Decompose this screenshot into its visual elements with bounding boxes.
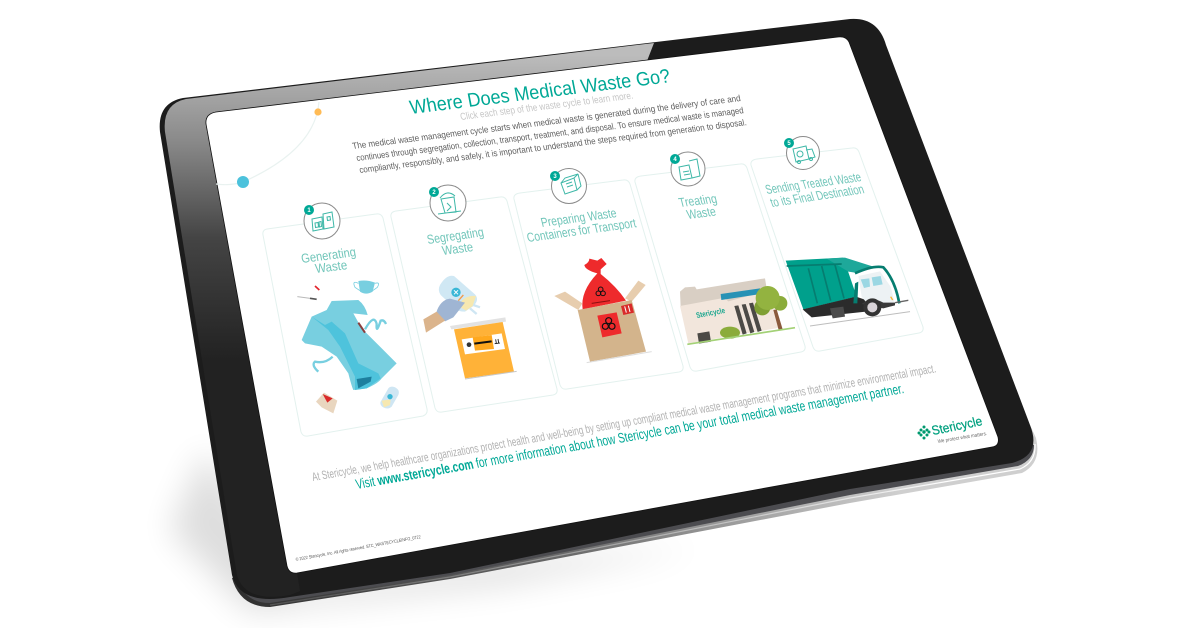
illustration: gown and waste items: [297, 280, 399, 413]
tablet device: [160, 19, 1037, 612]
logo tagline: We protect what matters.: [937, 431, 988, 445]
heading: Waste: [441, 239, 474, 258]
logo wordmark: Stericycle: [930, 413, 984, 438]
decorative arc with dots: [216, 102, 322, 188]
heading: [763, 169, 866, 210]
step icon: 3: [553, 174, 557, 180]
intro paragraph: compliantly, responsibly, and safely, it is important to understand the steps required from generation to disposal.: [358, 117, 747, 175]
heading: Waste: [685, 204, 718, 222]
illustration: hand, iv bag and sharps bin: [423, 276, 517, 379]
step icon: [429, 185, 466, 221]
step icon: [670, 152, 705, 186]
card outline: [514, 180, 683, 389]
title: Where Does Medical Waste Go?: [408, 65, 672, 119]
step icon: 1: [307, 208, 311, 214]
heading: Sending Treated Waste: [763, 169, 863, 197]
heading: Waste: [314, 257, 348, 276]
card outline: [751, 148, 923, 351]
heading: [300, 244, 357, 276]
step icon: 2: [432, 190, 436, 196]
heading: [525, 205, 638, 245]
step icon: 4: [673, 157, 677, 163]
step icon: 5: [787, 141, 791, 147]
heading: Segregating: [426, 224, 485, 247]
step icon: [550, 168, 586, 204]
illustration: red bag in cardboard box: [554, 258, 652, 363]
tablet bezel: [160, 19, 1033, 599]
illustration: garbage truck: [786, 258, 910, 326]
call to action: Visit www.stericycle.com for more information about how Stericycle can be your total medical waste management partner.: [354, 380, 905, 492]
heading: Treating: [677, 191, 719, 210]
card outline: [635, 164, 805, 371]
heading: to its Final Destination: [768, 182, 866, 210]
silver side edge: [232, 425, 1037, 607]
bezel gloss: [165, 43, 654, 597]
stericycle logo: [918, 413, 988, 445]
heading: Containers for Transport: [525, 215, 638, 245]
panel: segregating waste: [391, 185, 557, 412]
heading: [426, 224, 485, 258]
subtitle: Click each step of the waste cycle to learn more.: [459, 91, 634, 123]
heading: [677, 191, 719, 222]
heading: Preparing Waste: [539, 205, 618, 230]
logo mark: [918, 426, 930, 440]
step icon: [304, 203, 340, 239]
panel: preparing waste containers: [514, 168, 683, 389]
card outline: [391, 197, 557, 412]
copyright line: © 2022 Stericycle, Inc. All rights reserved. STC_WASTECYCLEINFO_0722: [295, 533, 421, 562]
drop shadow: [170, 450, 700, 612]
step icon: [784, 136, 820, 170]
card outline: [263, 214, 427, 436]
facility sign: Stericycle: [695, 306, 727, 320]
panel: generating waste: [263, 203, 427, 436]
panel: sending treated waste: [751, 136, 923, 351]
screen: [206, 37, 998, 573]
panel: treating waste: [635, 152, 805, 371]
illustration: stericycle facility: [680, 278, 795, 344]
intro paragraph: continues through segregation, collection, transport, treatment, and disposal. To ensure medical waste is managed: [355, 105, 744, 163]
heading: Generating: [300, 244, 357, 266]
intro paragraph: The medical waste management cycle starts when medical waste is generated during the delivery of care and: [351, 93, 741, 151]
